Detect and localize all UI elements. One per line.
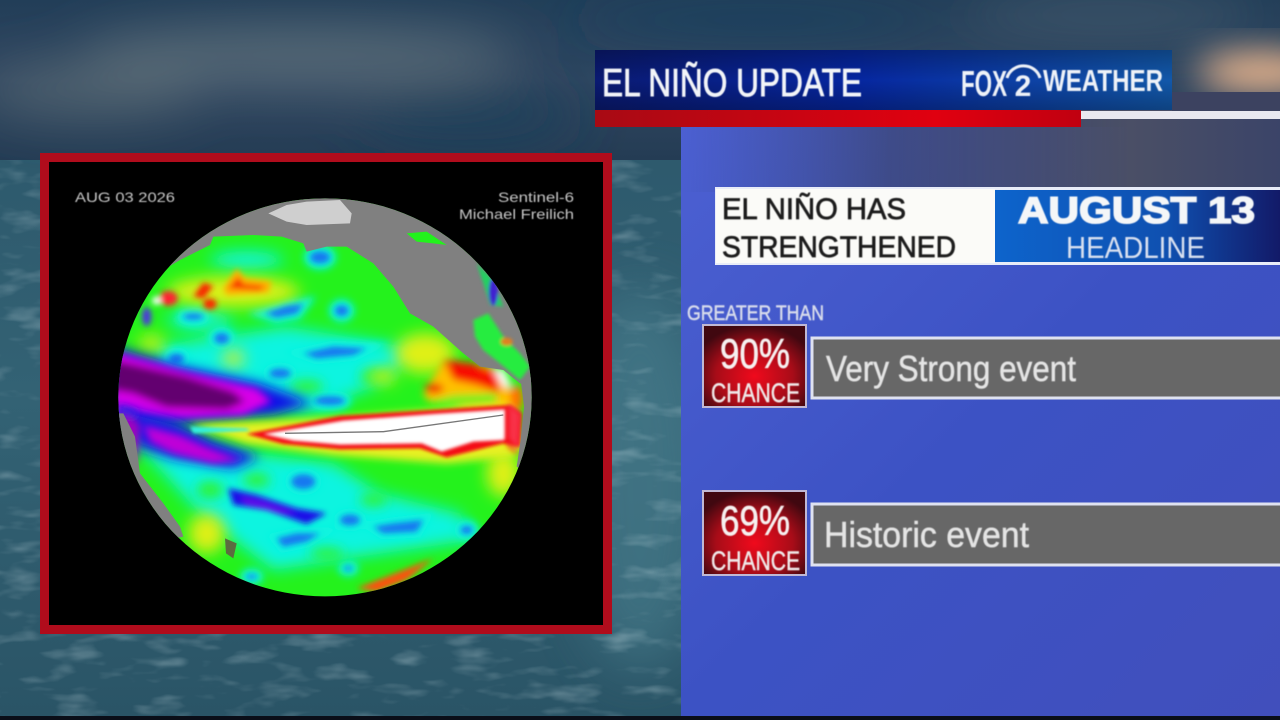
land: South America limb	[516, 377, 532, 468]
eastern warm pool	[423, 360, 523, 413]
satellite credit: Michael Freilich	[459, 206, 574, 222]
event bar: Historic event	[824, 514, 1029, 555]
headline tag: HEADLINE	[1066, 230, 1205, 265]
cold band south of equator	[117, 407, 260, 468]
purple cold band north of equator	[113, 352, 272, 418]
southern blue-violet streak	[228, 488, 327, 524]
logo: Fox 2 Weather: 2	[1015, 70, 1031, 103]
logo: Fox 2 Weather: FOX	[961, 63, 1007, 104]
warm anomaly northwest	[142, 268, 272, 326]
satellite credit: Sentinel-6	[498, 189, 574, 205]
cyan halos around blue patches	[169, 251, 473, 579]
right blue panel	[681, 92, 1280, 716]
equatorial warm tongue	[190, 403, 523, 463]
land: Central America bits	[473, 263, 530, 380]
date: AUGUST 13	[1018, 190, 1255, 231]
headline box	[715, 187, 1280, 265]
percent chip: CHANCE	[711, 378, 800, 408]
satellite credit	[459, 189, 574, 222]
white rule	[1081, 111, 1280, 119]
land: North America	[170, 198, 532, 384]
event bar	[812, 504, 1280, 565]
date label: AUG 03 2026	[75, 189, 175, 205]
logo: Fox 2 Weather	[961, 63, 1163, 104]
globe: sea level anomaly	[118, 198, 532, 596]
event bar: Very Strong event	[826, 348, 1076, 389]
southeast warm sliver	[357, 558, 433, 592]
blue patches	[169, 251, 473, 579]
row: historic event	[703, 491, 1280, 576]
island detail	[225, 538, 237, 558]
mottled green inside cyan field	[197, 369, 393, 559]
cool cyan field	[133, 251, 473, 570]
headline text: EL NIÑO HAS	[722, 192, 906, 226]
map frame	[44, 158, 608, 630]
row: very strong event	[703, 325, 1280, 408]
land: Asia and Australia limb	[119, 413, 184, 538]
title: EL NIÑO UPDATE	[602, 62, 862, 105]
headline text: STRENGTHENED	[722, 231, 956, 264]
logo: Fox 2 Weather: WEATHER	[1043, 63, 1163, 98]
event bar	[812, 338, 1280, 398]
panel: satellite map	[44, 158, 608, 630]
header banner	[595, 50, 1280, 127]
red rule	[595, 110, 1081, 127]
percent chip: CHANCE	[711, 546, 800, 576]
greater than label: GREATER THAN	[687, 302, 824, 325]
warm yellow patches	[138, 277, 520, 553]
percent chip: 90%	[720, 330, 790, 377]
cyan sliver along equator	[190, 427, 250, 433]
percent chip: 69%	[720, 497, 790, 544]
blue halo of the northern band	[113, 347, 313, 423]
percent chip	[703, 325, 806, 408]
headline text	[722, 192, 956, 264]
percent chip	[703, 491, 806, 576]
